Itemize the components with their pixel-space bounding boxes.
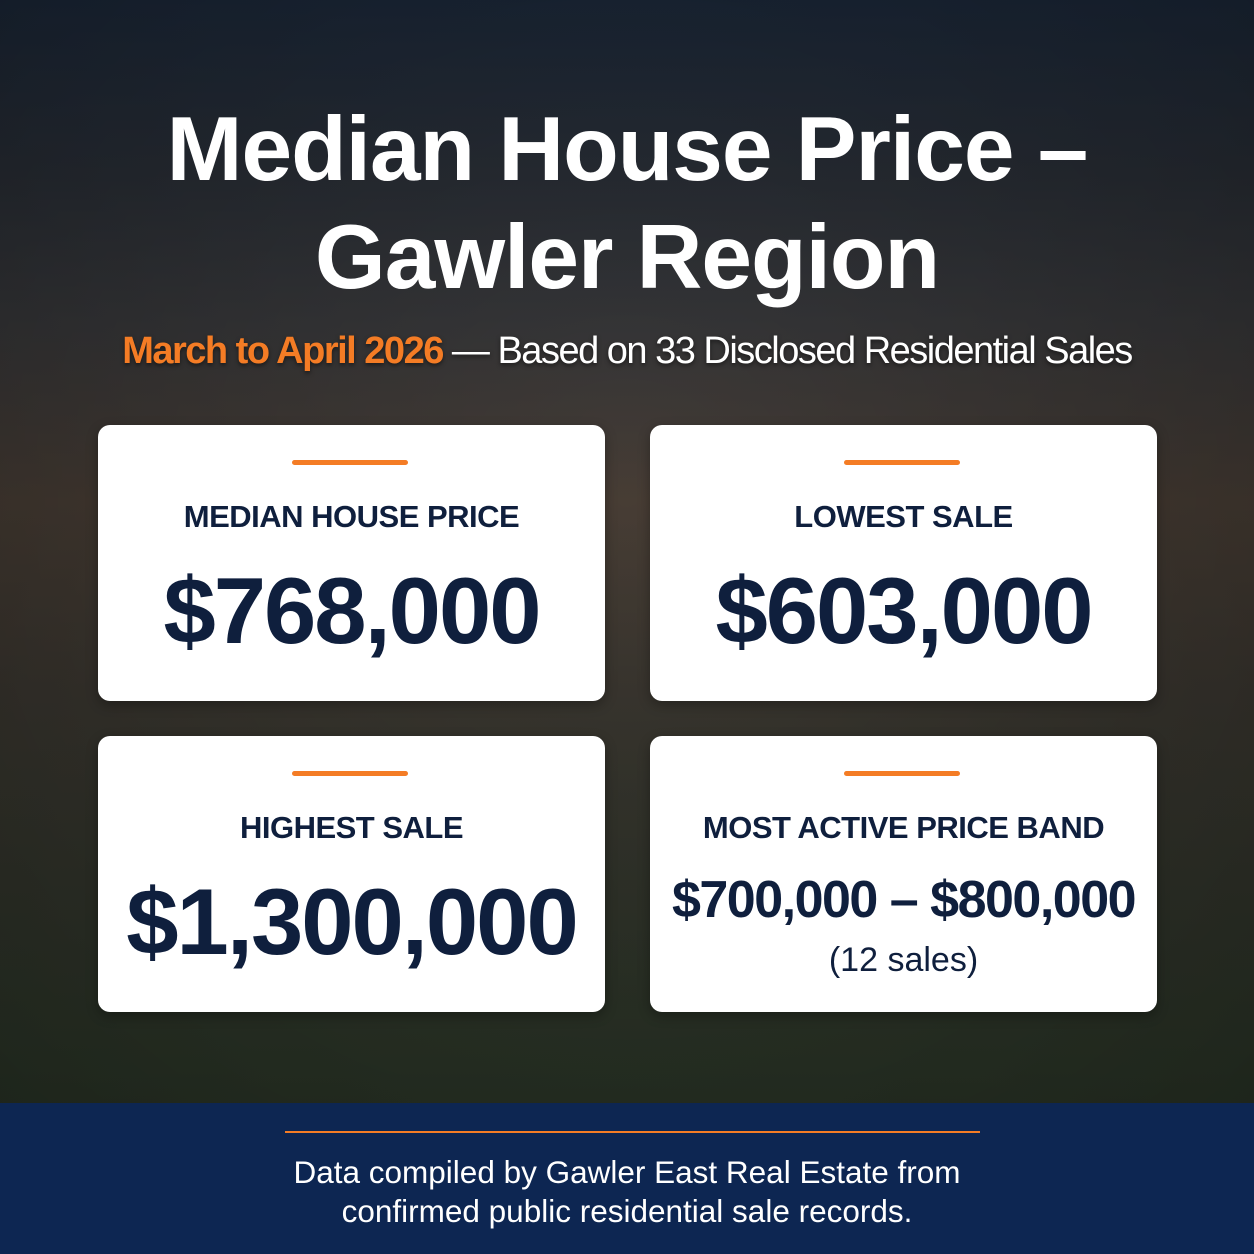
panel: highest sale — [98, 736, 605, 1012]
footer: Data compiled by Gawler East Real Estate from — [293, 1154, 961, 1190]
panel: most active price band: MOST ACTIVE PRICE BAND — [703, 810, 1104, 845]
panel: median house price: MEDIAN HOUSE PRICE — [184, 499, 519, 534]
panel: lowest sale: LOWEST SALE — [794, 499, 1013, 534]
panel: lowest sale — [650, 425, 1157, 701]
panel: highest sale: $1,300,000 — [126, 869, 577, 974]
panel: median house price — [98, 425, 605, 701]
panel: lowest sale: $603,000 — [715, 558, 1092, 663]
panel: median house price: $768,000 — [163, 558, 540, 663]
title — [167, 99, 1087, 308]
panel: highest sale: HIGHEST SALE — [240, 810, 463, 845]
panel: most active price band — [650, 736, 1157, 1012]
footer — [0, 1103, 1254, 1254]
panel: most active price band: $700,000 – $800,000 — [672, 871, 1135, 929]
title: Gawler Region — [315, 207, 939, 308]
panel: most active price band: (12 sales) — [829, 941, 978, 979]
subtitle: March to April 2026 — Based on 33 Disclosed Residential Sales — [122, 330, 1132, 372]
title: Median House Price – — [167, 99, 1087, 200]
footer: confirmed public residential sale records. — [342, 1193, 912, 1229]
